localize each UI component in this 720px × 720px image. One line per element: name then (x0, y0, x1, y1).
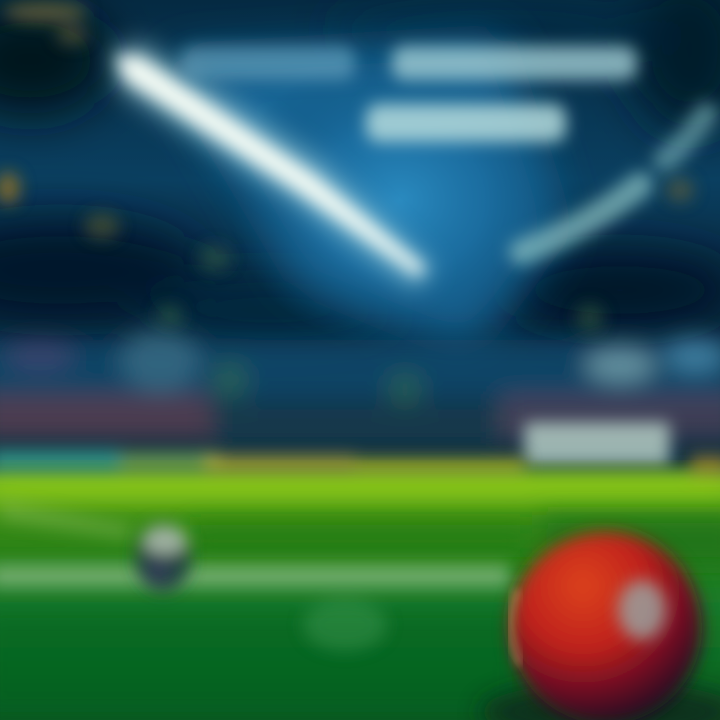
pitch edge colour band (0, 450, 720, 477)
bright upper grass (0, 476, 720, 496)
stadium crowd band (0, 328, 720, 445)
grass pitch (0, 472, 720, 720)
main light beam (116, 56, 425, 276)
white goal structure (524, 422, 670, 466)
central blue glow wedge (170, 40, 560, 350)
central blue glow (230, 50, 570, 350)
dark grass shading (0, 515, 720, 720)
ball rim highlight (511, 590, 520, 665)
red football (480, 532, 720, 720)
dark stadium roof corners (0, 0, 720, 338)
curved light strip, right (522, 105, 712, 252)
ball white patch (618, 580, 666, 640)
ball body (510, 532, 702, 720)
pitch white line (0, 500, 510, 651)
blurred headline text, line one (180, 46, 637, 80)
golden stadium lights (0, 2, 694, 332)
ball shadow (480, 682, 720, 720)
blurred headline text, line two (366, 104, 566, 142)
small distant ball (135, 524, 191, 592)
main light beam halo (112, 40, 435, 290)
